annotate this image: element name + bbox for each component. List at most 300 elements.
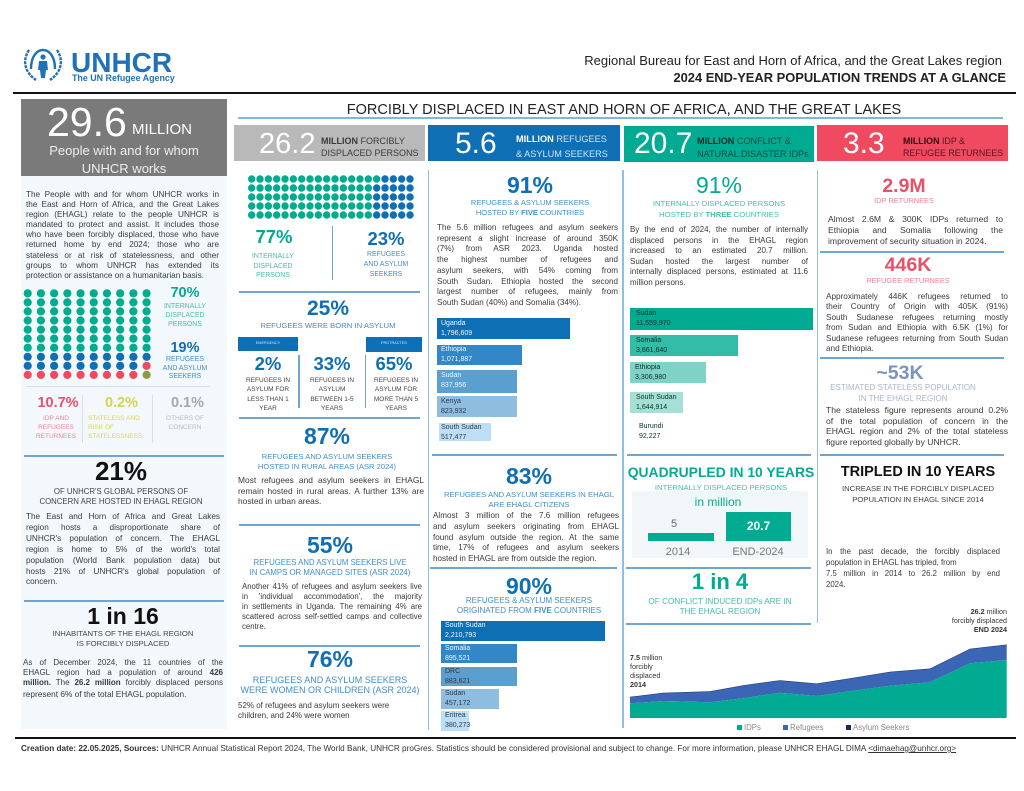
bar: Ethiopia IDPs: Ethiopia <box>635 364 660 371</box>
text: IDP increase: internally displaced persons, estimated at 11.6 <box>630 267 808 276</box>
header: bureau and report title: Regional Bureau for East and Horn of Africa, and the Great Lakes region <box>584 53 1002 68</box>
tag: protracted: PROTRACTED <box>381 341 407 345</box>
stat: 23% refugees: SEEKERS <box>370 271 402 278</box>
text: IDP increase <box>630 225 808 289</box>
bar: Ethiopia: Ethiopia <box>441 346 466 353</box>
text: refugee returns: their Country of Origin with 405K (91%) <box>826 302 1008 311</box>
label 3.3: MILLION IDP & <box>903 136 965 146</box>
caption: 83% EHAGL citizens: ARE EHAGL CITIZENS <box>489 500 569 509</box>
caption: 55% camps <box>250 558 410 577</box>
bar: South Sudan IDPs <box>630 392 683 413</box>
bar: Sudan IDPs <box>630 308 813 330</box>
bar: South Sudan IDPs: South Sudan <box>636 394 676 401</box>
panel: internally displaced <box>625 172 815 622</box>
stat: 33% 1-5 years: ASYLUM <box>319 386 345 393</box>
stat: 10.7% returnees: REFUGEES <box>38 424 74 431</box>
text: origin outside region: hosted in EHAGL are from outside the region. <box>433 554 596 563</box>
stat: 33% 1-5 years: BETWEEN 1-5 <box>310 396 354 403</box>
heading: quadrupled in 10 years: QUADRUPLED IN 10 YEARS <box>628 464 814 480</box>
text: regional population <box>23 658 223 699</box>
stat: 1 in 4: 1 in 4 <box>692 569 748 594</box>
caption: 1 in 16 <box>53 629 193 648</box>
caption: 21% global share: OF UNHCR'S GLOBAL PERSONS OF <box>54 487 188 496</box>
text: refugee returns: and Ethiopia. <box>826 344 874 353</box>
total unit: MILLION <box>132 121 192 138</box>
caption: tripled <box>826 484 1010 506</box>
text: refugee increase: the highest number of refugees and <box>437 255 618 264</box>
figure 26.2: 26.2 <box>259 128 315 160</box>
stat: 77% IDPs: DISPLACED <box>253 262 293 270</box>
section title: FORCIBLY DISPLACED IN EAST AND HORN OF AFRICA, AND THE GREAT LAKES <box>347 102 901 118</box>
text: origin outside region: time, 17% of refugees and asylum seekers <box>433 543 619 552</box>
total description: UNHCR works <box>82 161 166 176</box>
label 26.2: MILLION FORCIBLY <box>321 136 405 146</box>
stat: 65% over 5 years: REFUGEES IN <box>374 377 418 384</box>
stat: 33% 1-5 years: REFUGEES IN <box>310 377 354 384</box>
bar: Kenya <box>437 396 517 417</box>
caption: 21% global share: CONCERN ARE HOSTED IN EHAGL REGION <box>39 497 203 506</box>
bar: South Sudan IDPs: 1,644,914 <box>636 404 667 411</box>
intro text <box>26 190 219 280</box>
bar: Uganda: 1,796,609 <box>441 330 472 337</box>
header: UNHCR logo <box>24 47 175 83</box>
caption: 91% hosted by five countries <box>471 198 589 217</box>
text: stateless share: The stateless figure represents around 0.2% <box>826 405 1008 415</box>
logo tagline: The UN Refugee Agency <box>72 73 175 83</box>
stat: 0.2% stateless: STATELESSNESS <box>88 433 142 440</box>
caption: 55% camps: IN CAMPS OR MANAGED SITES (ASR 2024) <box>250 568 410 577</box>
caption: IDP returnees: IDP RETURNEES <box>874 196 934 205</box>
bar: Ethiopia: 1,071,887 <box>441 356 472 363</box>
stat: 0.1% others: CONCERN <box>169 424 201 431</box>
caption: 91% hosted by three countries <box>630 198 808 220</box>
text: IDP increase: million persons. <box>630 278 686 287</box>
caption: stateless: ESTIMATED STATELESS POPULATION <box>830 383 976 392</box>
figure 3.3: 3.3 <box>843 127 885 160</box>
intro text: mandated to protect and assist. It includes those <box>26 220 219 229</box>
text: disproportionate share: hosts 21% of UNHCR's global population of <box>26 567 220 576</box>
stat: 91% hosted by three countries: 91% <box>696 172 742 198</box>
text: rural hosting: hosted in urban areas. <box>238 496 321 506</box>
annotation: 7.5 million 2014 <box>630 653 662 689</box>
caption: 91% hosted by five countries: REFUGEES & ASYLUM SEEKERS <box>471 198 589 207</box>
text: other accommodation: in settlements in Uganda. The remaining 4% are <box>242 602 422 611</box>
bar: Eritrea origin: Eritrea <box>445 712 466 719</box>
stat: 10.7% returnees: RETURNEES <box>36 433 76 440</box>
stat: ~53K stateless: ~53K <box>876 362 924 384</box>
caption: 76% women and children: WERE WOMEN OR CHILDREN (ASR 2024) <box>240 685 420 695</box>
text: refugee returns: South Sudanese refugees returning mostly <box>826 313 1008 322</box>
stat: 77% IDPs <box>252 226 294 279</box>
stat: 19% refugees: SEEKERS <box>169 373 201 380</box>
stat: 0.1% others: 0.1% <box>171 395 204 411</box>
caption: 1 in 4 <box>630 597 810 617</box>
text: refugee returns: Sudanese refugees returning from South Sudan <box>826 334 1008 343</box>
figure 5.6: 5.6 <box>455 127 497 160</box>
stat: 65% over 5 years <box>374 353 418 412</box>
text: regional population: EHAGL region had a population of around 426 <box>23 668 223 677</box>
bar: Kenya: Kenya <box>441 398 461 405</box>
text: refugee increase: The 5.6 million refugees and asylum seekers <box>437 223 618 232</box>
area chart: displacement trend <box>630 644 1007 718</box>
stat: 23% refugees <box>364 228 408 278</box>
stat: 23% refugees: AND ASYLUM <box>364 261 408 268</box>
text: other accommodation: in 'individual accommodation', the majority <box>242 592 422 601</box>
bar: Sudan: 837,956 <box>441 382 466 389</box>
text: women and children <box>238 701 389 720</box>
bar: South Sudan <box>439 423 491 441</box>
caption: 76% women and children: REFUGEES AND ASYLUM SEEKERS <box>253 675 407 685</box>
stat: 21% global share: 21% <box>95 456 147 486</box>
heading: tripled in 10 years: TRIPLED IN 10 YEARS <box>841 464 995 480</box>
stat: 33% 1-5 years: 33% <box>313 353 351 374</box>
text: disproportionate share: concern. <box>26 577 57 586</box>
stat: 70% IDPs: 70% <box>170 285 200 301</box>
stat: 2% under 1 year: LESS THAN 1 <box>247 396 289 403</box>
text: other accommodation: Another 41% of refugees and asylum seekers live <box>242 582 422 591</box>
bar: end-2024 <box>726 512 791 541</box>
text: refugee returns: Approximately 446K refugees returned to <box>826 292 1008 301</box>
text: IDP increase: By the end of 2024, the number of internally <box>630 225 808 234</box>
total headline box <box>21 99 227 176</box>
text: refugee increase: South Sudan. Ethiopia hosted the second <box>437 277 618 286</box>
label 20.7 <box>697 136 809 159</box>
bar: Eritrea origin: 380,273 <box>445 722 470 729</box>
caption: stateless <box>820 383 986 405</box>
label 20.7: NATURAL DISASTER IDPs <box>697 149 809 159</box>
bar: DRC origin <box>441 667 517 686</box>
text: tripled explanation <box>826 546 1000 590</box>
caption: quadrupled: INTERNALLY DISPLACED PERSONS <box>655 483 787 492</box>
text: other accommodation: scattered across self-settled camps and collective <box>242 612 422 621</box>
text: IDP increase: Sudan hosted the largest number of <box>630 257 808 266</box>
annotation: 26.2 million end 2024: 26.2 million <box>971 607 1007 616</box>
total figure: 29.6 <box>47 99 127 145</box>
caption: 1 in 16: INHABITANTS OF THE EHAGL REGION <box>53 629 193 638</box>
text: refugee increase: largest number of refugees, mainly from <box>437 287 618 296</box>
bar: South Sudan origin: 2,210,793 <box>445 632 476 639</box>
chart legend <box>735 723 915 733</box>
bar: Uganda: Uganda <box>441 320 466 327</box>
text: stateless share: figure reported globally by UNHCR. <box>826 437 961 447</box>
bar: Somalia origin: Somalia <box>445 645 470 652</box>
bar: Sudan <box>437 370 517 393</box>
stat: 23% refugees: REFUGEES <box>367 251 405 258</box>
caption: 90% five origin countries: ORIGINATED FROM FIVE COUNTRIES <box>457 606 601 615</box>
bar: Ethiopia <box>437 345 522 365</box>
caption: stateless: IN THE EHAGL REGION <box>859 394 947 403</box>
bar: Somalia IDPs: Somalia <box>636 337 661 344</box>
text: origin outside region: Almost 3 million of the 7.6 million refugees <box>433 511 619 520</box>
stat: 0.2% stateless: RISK OF <box>88 424 114 431</box>
text: refugee returns <box>826 292 1008 354</box>
text: disproportionate share: population (World Bank population data) but <box>26 556 220 565</box>
figure 20.7: 20.7 <box>634 127 692 160</box>
bar: Ethiopia IDPs <box>630 362 706 383</box>
bar: end-2024: 20.7 <box>747 519 770 533</box>
caption: 91% hosted by three countries: HOSTED BY THREE COUNTRIES <box>659 210 779 219</box>
legend: IDPs <box>737 723 761 733</box>
stat: 77% IDPs: INTERNALLY <box>252 253 294 260</box>
stat: 77% IDPs: PERSONS <box>256 272 290 279</box>
text: tripled explanation: In the past decade, the forcibly displaced <box>826 547 1000 556</box>
text: tripled explanation: population in EHAGL has tripled, from <box>826 558 957 567</box>
header box: 5.6 million refugees <box>428 125 620 161</box>
panel: returnees and stateless <box>820 172 1010 456</box>
stat: 33% 1-5 years <box>310 353 354 412</box>
stat: 65% over 5 years: YEARS <box>385 405 407 412</box>
intro text: groups to whom UNHCR has extended its <box>26 261 219 270</box>
stat: 55% camps: 55% <box>307 532 353 558</box>
stat: 2% under 1 year <box>246 353 290 412</box>
bar chart: host countries <box>437 318 570 441</box>
caption: 87% rural <box>258 452 396 471</box>
stat: 2% under 1 year: ASYLUM FOR <box>247 386 289 393</box>
waffle chart: population breakdown <box>24 289 151 379</box>
stat: 19% refugees <box>162 340 207 380</box>
stat: 65% over 5 years: MORE THAN 5 <box>374 396 418 403</box>
intro text: The People with and for whom UNHCR works in <box>26 190 219 199</box>
text: regional population: As of December 2024, the 11 countries of the <box>23 658 223 667</box>
caption: 1 in 16: IS FORCIBLY DISPLACED <box>77 639 169 648</box>
text: tripled explanation: 2024. <box>826 580 846 589</box>
text: stateless share <box>826 405 1008 447</box>
bar: DRC origin: 883,621 <box>445 678 470 685</box>
bar: Sudan origin: Sudan <box>445 690 465 697</box>
text: rural hosting: remain hosted in rural areas. A further 13% are <box>238 486 424 496</box>
stat: 0.2% stateless: STATELESS AND <box>88 415 140 422</box>
label 3.3: REFUGEE RETURNEES <box>903 148 1003 158</box>
footer: sources and contact: Creation date: 22.05.2025, Sources: UNHCR Annual Statistical Report 2024, The World Bank, UNHCR proGres. Statistics should be considered provisional and subject to change. For more information, please UNHCR EHAGL DIMA <dimaehag@unhcr.org> <box>21 744 956 753</box>
panel: tripled in 10 years <box>626 460 1010 735</box>
tag: emergency <box>238 337 298 351</box>
bar: South Sudan origin <box>441 621 605 641</box>
bar: Sudan origin: 457,172 <box>445 700 470 707</box>
stat: 33% 1-5 years: YEARS <box>321 405 343 412</box>
intro text: stateless or at risk of statelessness, and other <box>26 251 219 260</box>
caption: 90% five origin countries <box>457 596 601 615</box>
label 5.6: & ASYLUM SEEKERS <box>516 149 608 159</box>
caption: 91% hosted by three countries: INTERNALLY DISPLACED PERSONS <box>653 199 785 208</box>
bar: Sudan IDPs: 11,559,970 <box>636 320 671 327</box>
legend: asylum seekers: Asylum Seekers <box>853 723 909 732</box>
text: IDP returns: Ethiopia and Somalia following the <box>828 225 1003 235</box>
bar: Burundi IDPs: Burundi <box>639 423 663 430</box>
annotation: 7.5 million 2014: displaced <box>630 671 660 680</box>
bar: Somalia IDPs <box>630 335 738 356</box>
intro text: who have been forcibly displaced, those who have <box>26 230 219 239</box>
caption: 83% EHAGL citizens: REFUGEES AND ASYLUM SEEKERS IN EHAGL <box>444 490 614 499</box>
text: origin outside region <box>433 511 619 563</box>
annotation: 26.2 million end 2024 <box>945 607 1007 635</box>
text: disproportionate share: region hosts a disproportionate share of <box>26 523 220 532</box>
logo wordmark: UNHCR <box>71 47 172 78</box>
text: other accommodation <box>242 582 422 631</box>
stat: 70% IDPs: PERSONS <box>168 321 202 328</box>
text: stateless share: of the total population of concern in the <box>826 416 1008 426</box>
stat: 19% refugees: 19% <box>170 340 200 356</box>
stat: 87% rural: 87% <box>304 423 350 449</box>
stat: 2% under 1 year: YEAR <box>259 405 277 412</box>
text: IDP increase: displaced persons in the EHAGL region <box>630 236 808 245</box>
stat: 0.1% others: OTHERS OF <box>166 415 204 422</box>
bar: Sudan origin <box>441 689 499 709</box>
stat: 2% under 1 year: REFUGEES IN <box>246 377 290 384</box>
stat: 0.2% stateless <box>88 395 142 440</box>
bar: South Sudan: South Sudan <box>441 424 481 431</box>
bar: 2014 <box>648 533 714 541</box>
label 5.6: MILLION REFUGEES <box>516 134 607 144</box>
label 26.2 <box>321 136 419 158</box>
text: disproportionate share <box>26 512 220 586</box>
text: women and children: children, and 24% were women <box>238 711 350 720</box>
icon: UNHCR emblem <box>24 48 62 81</box>
intro text: the East and Horn of Africa, and the Great Lakes <box>26 200 219 209</box>
annotation: 7.5 million 2014: forcibly <box>630 662 653 671</box>
annotation: 7.5 million 2014: 7.5 million <box>630 653 662 662</box>
stat: 0.1% others <box>166 395 204 431</box>
text: women and children: 52% of refugees and asylum seekers were <box>238 701 389 710</box>
header box: 26.2 million forcibly displaced <box>234 125 425 161</box>
value: 5 in 2014: 5 <box>671 518 677 530</box>
text: refugee increase: asylum seekers, with 54% coming from <box>437 266 618 275</box>
total description <box>49 143 199 176</box>
stat: 446K refugee returnees: 446K <box>885 254 931 276</box>
caption: 87% rural: HOSTED IN RURAL AREAS (ASR 2024) <box>258 462 396 471</box>
caption: 55% camps: REFUGEES AND ASYLUM SEEKERS LIVE <box>254 558 406 567</box>
bar chart: IDPs 2014 vs 2024 <box>632 491 808 558</box>
text: regional population: million. The 26.2 million forcibly displaced persons <box>23 678 223 687</box>
bar chart: origin countries <box>441 621 605 731</box>
axis label end-2024: END-2024 <box>732 546 784 558</box>
text: disproportionate share: UNHCR's population of concern. The EHAGL <box>26 534 220 543</box>
text: other accommodation: centre. <box>242 622 266 631</box>
caption: 91% hosted by five countries: HOSTED BY FIVE COUNTRIES <box>476 208 584 217</box>
bar: Ethiopia IDPs: 3,306,980 <box>635 374 666 381</box>
caption: 83% EHAGL citizens <box>444 490 614 509</box>
intro text: region (EHAGL) relate to the people UNHCR is <box>26 210 219 219</box>
bar chart: IDP host countries <box>630 308 813 441</box>
stat: 65% over 5 years: 65% <box>375 353 413 374</box>
legend: refugees: Refugees <box>790 723 823 732</box>
caption: 1 in 4: OF CONFLICT INDUCED IDPs ARE IN <box>648 597 792 606</box>
bar: Kenya: 823,932 <box>441 408 466 415</box>
header box: 20.7 million IDPs <box>624 126 814 162</box>
stat: 23% refugees: 23% <box>367 228 405 249</box>
intro text: protection or assistance on a humanitarian basis. <box>26 271 204 280</box>
text: refugee increase: (7%) from ASR 2023. Uganda hosted <box>437 244 618 253</box>
stat: 2% under 1 year: 2% <box>255 353 281 374</box>
bar: Sudan IDPs: Sudan <box>636 310 656 317</box>
label 20.7: MILLION CONFLICT & <box>697 136 791 146</box>
stat: 70% IDPs <box>164 285 206 328</box>
waffle chart: IDPs vs refugees <box>248 175 414 219</box>
legend: IDPs: IDPs <box>744 723 761 732</box>
text: IDP returns <box>828 214 1003 247</box>
caption: 21% global share <box>39 487 203 506</box>
bar: Somalia IDPs: 3,661,640 <box>636 347 667 354</box>
bar: Uganda <box>437 318 570 339</box>
label 26.2: DISPLACED PERSONS <box>321 148 419 158</box>
text: disproportionate share: The East and Horn of Africa and Great Lakes <box>26 512 220 521</box>
stat: 70% IDPs: INTERNALLY <box>164 303 206 310</box>
bar: Sudan: Sudan <box>441 372 461 379</box>
text: IDP returns: improvement of security situation in 2024. <box>828 236 987 246</box>
bar: South Sudan origin: South Sudan <box>445 622 485 629</box>
bar: Somalia origin: 895,521 <box>445 655 470 662</box>
text: IDP returns: Almost 2.6M & 300K IDPs returned to <box>828 214 1003 224</box>
bar: DRC origin: DRC <box>445 668 460 675</box>
stat: 90% five origin countries: 90% <box>506 573 552 599</box>
label 3.3 <box>903 136 1003 158</box>
stat: 10.7% returnees <box>36 395 79 440</box>
caption: tripled: INCREASE IN THE FORCIBLY DISPLACED <box>842 484 994 493</box>
text: refugee increase: represent a slight increase of around 350K <box>437 234 618 243</box>
bar: South Sudan: 517,477 <box>441 434 466 441</box>
stat: 77% IDPs: 77% <box>255 226 293 247</box>
text: regional population: represent 6% of the total EHAGL population. <box>23 689 186 699</box>
caption: 1 in 4: THE EHAGL REGION <box>680 607 760 616</box>
caption: refugee returnees: REFUGEE RETURNEES <box>866 276 950 285</box>
total description: People with and for whom <box>49 143 199 158</box>
stat: 65% over 5 years: ASYLUM FOR <box>375 386 417 393</box>
annotation: 26.2 million end 2024: forcibly displaced <box>952 616 1007 625</box>
tag: protracted <box>366 337 422 352</box>
caption: tripled: POPULATION IN EHAGL SINCE 2014 <box>852 495 984 504</box>
caption: 76% women and children <box>240 675 420 695</box>
annotation: 7.5 million 2014: 2014 <box>630 680 646 689</box>
text: IDP increase: increased to an estimated 20.7 million. <box>630 246 808 255</box>
stat: 70% IDPs: DISPLACED <box>165 312 205 319</box>
bar: Somalia origin <box>441 644 517 663</box>
stat: 76% women and children: 76% <box>307 646 353 672</box>
text: rural hosting <box>238 475 424 506</box>
stat: 25% born in asylum: 25% <box>307 297 349 320</box>
bar: Eritrea origin <box>441 711 469 731</box>
header: bureau and report title <box>584 53 1006 85</box>
stat: 10.7% returnees: IDP AND <box>43 415 69 422</box>
header: bureau and report title: 2024 END-YEAR POPULATION TRENDS AT A GLANCE <box>673 70 1006 85</box>
text: tripled explanation: 7.5 million in 2014 to 26.2 million by end <box>826 569 1000 578</box>
caption: 25% born in asylum: REFUGEES WERE BORN IN ASYLUM <box>260 321 395 330</box>
stat: 1 in 16: 1 in 16 <box>87 603 159 629</box>
text: refugee returns: from Sudan and Ethiopia with 6.5K (1%) for <box>826 323 1008 332</box>
annotation: 26.2 million end 2024: END 2024 <box>974 625 1007 634</box>
text: rural hosting: Most refugees and asylum seekers in EHAGL <box>238 475 424 485</box>
stat: 2.9M IDP returnees: 2.9M <box>882 175 926 197</box>
header box: 3.3 million returnees <box>817 125 1008 161</box>
stat: 10.7% returnees: 10.7% <box>37 395 79 411</box>
text: origin outside region: found asylum outside the region. At the same <box>433 533 619 542</box>
stat: 19% refugees: AND ASYLUM <box>163 365 207 372</box>
stat: 83% EHAGL citizens: 83% <box>506 463 552 489</box>
caption: 87% rural: REFUGEES AND ASYLUM SEEKERS <box>262 452 392 461</box>
axis label 2014: 2014 <box>666 546 690 558</box>
stat: 19% refugees: REFUGEES <box>166 356 204 363</box>
text: origin outside region: and asylum seekers originating from EHAGL <box>433 522 619 531</box>
left panel: people with and for whom UNHCR works <box>21 99 227 729</box>
caption: 90% five origin countries: REFUGEES & ASYLUM SEEKERS <box>466 596 592 605</box>
text: stateless share: EHAGL region and 2% of the total stateless <box>826 426 1008 436</box>
stat: 0.2% stateless: 0.2% <box>105 395 138 411</box>
chart unit: in million <box>695 495 741 509</box>
panel: refugees and asylum seekers <box>430 172 619 731</box>
text: disproportionate share: region is home to 5% of the world's total <box>26 545 220 554</box>
tag: emergency: EMERGENCY <box>256 341 280 345</box>
text: refugee increase <box>437 223 618 307</box>
bar: Burundi IDPs: 92,227 <box>639 433 660 440</box>
text: refugee increase: South Sudan (40%) and Somalia (34%). <box>437 298 581 307</box>
